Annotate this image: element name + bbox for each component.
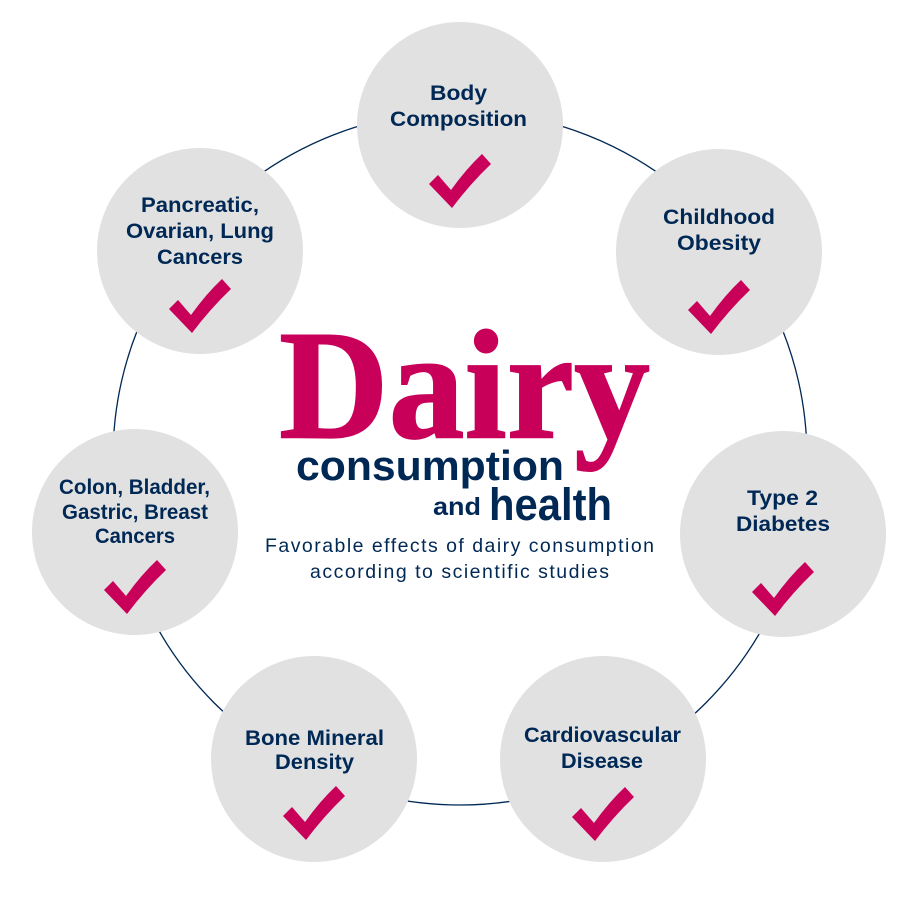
icon: check mark — [688, 280, 750, 334]
label: Cardiovascular Disease: Disease — [561, 749, 643, 773]
label: Type 2 Diabetes — [736, 486, 830, 536]
icon: check mark — [283, 786, 345, 840]
icon: check mark — [169, 279, 231, 333]
label: Colon, Bladder, Gastric, Breast Cancers: Colon, Bladder, — [59, 475, 210, 499]
label: Type 2 Diabetes: Type 2 — [747, 486, 818, 510]
title — [279, 298, 650, 530]
icon: check mark — [429, 154, 491, 208]
panel: Body Composition — [357, 22, 563, 228]
title word: consumption: consumption — [296, 442, 564, 489]
label: Pancreatic, Ovarian, Lung Cancers: Pancreatic, — [141, 193, 259, 217]
label: Bone Mineral Density: Density — [275, 750, 354, 774]
panel: Childhood Obesity — [616, 149, 822, 355]
label: Childhood Obesity: Obesity — [677, 231, 761, 255]
icon: check mark — [104, 560, 166, 614]
panel: Pancreatic, Ovarian, Lung Cancers — [97, 148, 303, 354]
label: Colon, Bladder, Gastric, Breast Cancers: Cancers — [95, 524, 175, 548]
title word: and: and — [433, 493, 481, 521]
title word: Dairy: Dairy — [279, 298, 650, 472]
subtitle — [265, 535, 654, 583]
label: Body Composition: Body — [430, 81, 487, 105]
label: Pancreatic, Ovarian, Lung Cancers: Ovarian, Lung — [126, 219, 274, 243]
label: Type 2 Diabetes: Diabetes — [736, 512, 830, 536]
label: Pancreatic, Ovarian, Lung Cancers — [126, 193, 274, 269]
label: Colon, Bladder, Gastric, Breast Cancers: Gastric, Breast — [62, 500, 208, 524]
subtitle: Favorable effects of dairy consumption — [265, 535, 654, 557]
label: Cardiovascular Disease — [524, 723, 682, 773]
label: Body Composition — [390, 81, 527, 131]
label: Body Composition: Composition — [390, 107, 527, 131]
panel: Colon, Bladder, Gastric, Breast Cancers — [32, 429, 238, 635]
label: Pancreatic, Ovarian, Lung Cancers: Cancers — [157, 245, 243, 269]
subtitle: according to scientific studies — [310, 561, 609, 583]
panel: Bone Mineral Density — [211, 656, 417, 862]
panel: Type 2 Diabetes — [680, 431, 886, 637]
label: Cardiovascular Disease: Cardiovascular — [524, 723, 682, 747]
label: Childhood Obesity — [663, 205, 775, 255]
label: Colon, Bladder, Gastric, Breast Cancers — [59, 475, 210, 548]
icon: check mark — [572, 787, 634, 841]
label: Bone Mineral Density: Bone Mineral — [245, 726, 384, 750]
label: Bone Mineral Density — [245, 726, 384, 774]
title word: health: health — [489, 479, 612, 530]
label: Childhood Obesity: Childhood — [663, 205, 775, 229]
icon: check mark — [752, 562, 814, 616]
panel: Cardiovascular Disease — [500, 656, 706, 862]
